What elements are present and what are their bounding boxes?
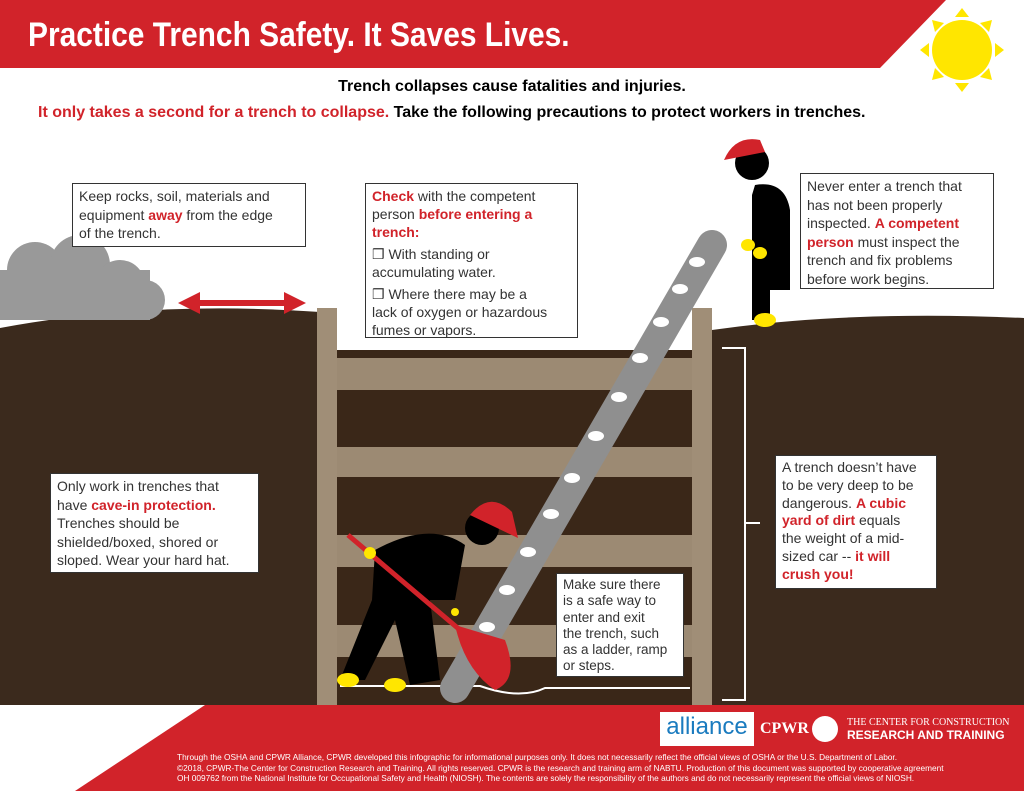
callout: check with competent person: fumes or vapors.: [372, 322, 476, 338]
logo: CPWR: CPWR: [760, 720, 809, 737]
subtitle: Trench collapses cause fatalities and injuries.: [338, 78, 686, 95]
callout: check with competent person: trench:: [372, 224, 419, 240]
callout: check with competent person: [365, 183, 578, 338]
callout: cubic yard of dirt: [775, 455, 937, 589]
footer disclaimer: [177, 752, 944, 783]
callout: cave-in protection: [50, 473, 259, 573]
callout: keep away from edge: Keep rocks, soil, materials and: [79, 188, 270, 204]
callout: never enter uninspected trench: person must inspect the: [807, 234, 960, 250]
worker digging: [337, 502, 518, 692]
logo: center text: THE CENTER FOR CONSTRUCTION: [847, 717, 1010, 728]
callout: never enter uninspected trench: before work begins.: [807, 270, 929, 286]
callout: keep away from edge: equipment away from the edge: [79, 206, 273, 222]
logo: circle mark: [812, 716, 838, 742]
callout: check with competent person: ❒ With standing or: [372, 246, 490, 262]
footer banner: [75, 705, 1024, 791]
callout: never enter uninspected trench: [800, 173, 994, 289]
callout: never enter uninspected trench: inspected. A competent: [807, 215, 959, 231]
callout: check with competent person: ❒ Where there may be a: [372, 286, 527, 302]
logo: alliance: alliance: [666, 713, 748, 740]
footer disclaimer: OH 009762 from the National Institute for Occupational Safety and Health (NIOSH). The contents are solely the responsibility of the authors and do not necessarily represent the official views of NIOSH.: [177, 773, 914, 783]
ground: left: [0, 308, 320, 705]
arrow: double headed: [178, 292, 306, 314]
callout: cubic yard of dirt: dangerous. A cubic: [782, 495, 906, 511]
bracket depth: [722, 348, 760, 700]
callout: cubic yard of dirt: the weight of a mid-: [782, 530, 904, 546]
callout: cubic yard of dirt: yard of dirt equals: [782, 512, 900, 528]
footer disclaimer: ©2018, CPWR-The Center for Construction Research and Training. All rights reserved. CPWR is the research and training arm of NABTU. Production of this document was supported by cooperative agreement: [177, 762, 944, 772]
icon: sun: [920, 8, 1004, 92]
logos: [660, 712, 1010, 746]
callout: check with competent person: accumulating water.: [372, 264, 496, 280]
callout: cave-in protection: shielded/boxed, shored or: [57, 534, 218, 550]
footer disclaimer: Through the OSHA and CPWR Alliance, CPWR developed this infographic for informational purposes only. It does not necessarily reflect the official views of OSHA or the U.S. Department of Labor.: [177, 752, 897, 762]
title: Practice Trench Safety. It Saves Lives.: [28, 16, 570, 54]
callout: keep away from edge: of the trench.: [79, 225, 161, 241]
logo: center text: RESEARCH AND TRAINING: [847, 728, 1005, 742]
callout: check with competent person: lack of oxygen or hazardous: [372, 304, 547, 320]
header banner: [0, 0, 946, 68]
callout: cave-in protection: sloped. Wear your hard hat.: [57, 552, 230, 568]
callout: cubic yard of dirt: crush you!: [782, 566, 854, 582]
callout: never enter uninspected trench: has not been properly: [807, 196, 942, 212]
callout: check with competent person: Check with the competent: [372, 188, 535, 204]
callout: safe way to exit: enter and exit: [563, 610, 645, 625]
worker standing: [724, 139, 790, 327]
callout: cave-in protection: Only work in trenches that: [57, 478, 219, 494]
callout: safe way to exit: [556, 573, 684, 677]
logo: alliance: [660, 712, 754, 746]
ground: right: [712, 316, 1024, 705]
callout: cave-in protection: Trenches should be: [57, 515, 179, 531]
callout: check with competent person: person before entering a: [372, 206, 532, 222]
ladder: [455, 245, 712, 688]
callout: safe way to exit: as a ladder, ramp: [563, 642, 667, 657]
callout: never enter uninspected trench: Never enter a trench that: [807, 178, 962, 194]
callout: safe way to exit: is a safe way to: [563, 593, 656, 608]
subtitle line 2: It only takes a second for a trench to collapse. Take the following precautions to protect workers in trenches.: [38, 104, 865, 121]
logo: center text: [847, 717, 1010, 742]
callout: cubic yard of dirt: sized car -- it will: [782, 548, 890, 564]
callout: keep away from edge: [72, 183, 306, 247]
trench interior: [317, 308, 712, 705]
callout: safe way to exit: or steps.: [563, 658, 615, 673]
callout: safe way to exit: the trench, such: [563, 626, 659, 641]
callout: never enter uninspected trench: trench and fix problems: [807, 252, 953, 268]
callout: cubic yard of dirt: to be very deep to be: [782, 477, 914, 493]
callout: safe way to exit: Make sure there: [563, 577, 661, 592]
callout: cave-in protection: have cave-in protection.: [57, 496, 216, 512]
icon: cloud: [0, 235, 165, 320]
callout: cubic yard of dirt: A trench doesn’t have: [782, 459, 917, 475]
